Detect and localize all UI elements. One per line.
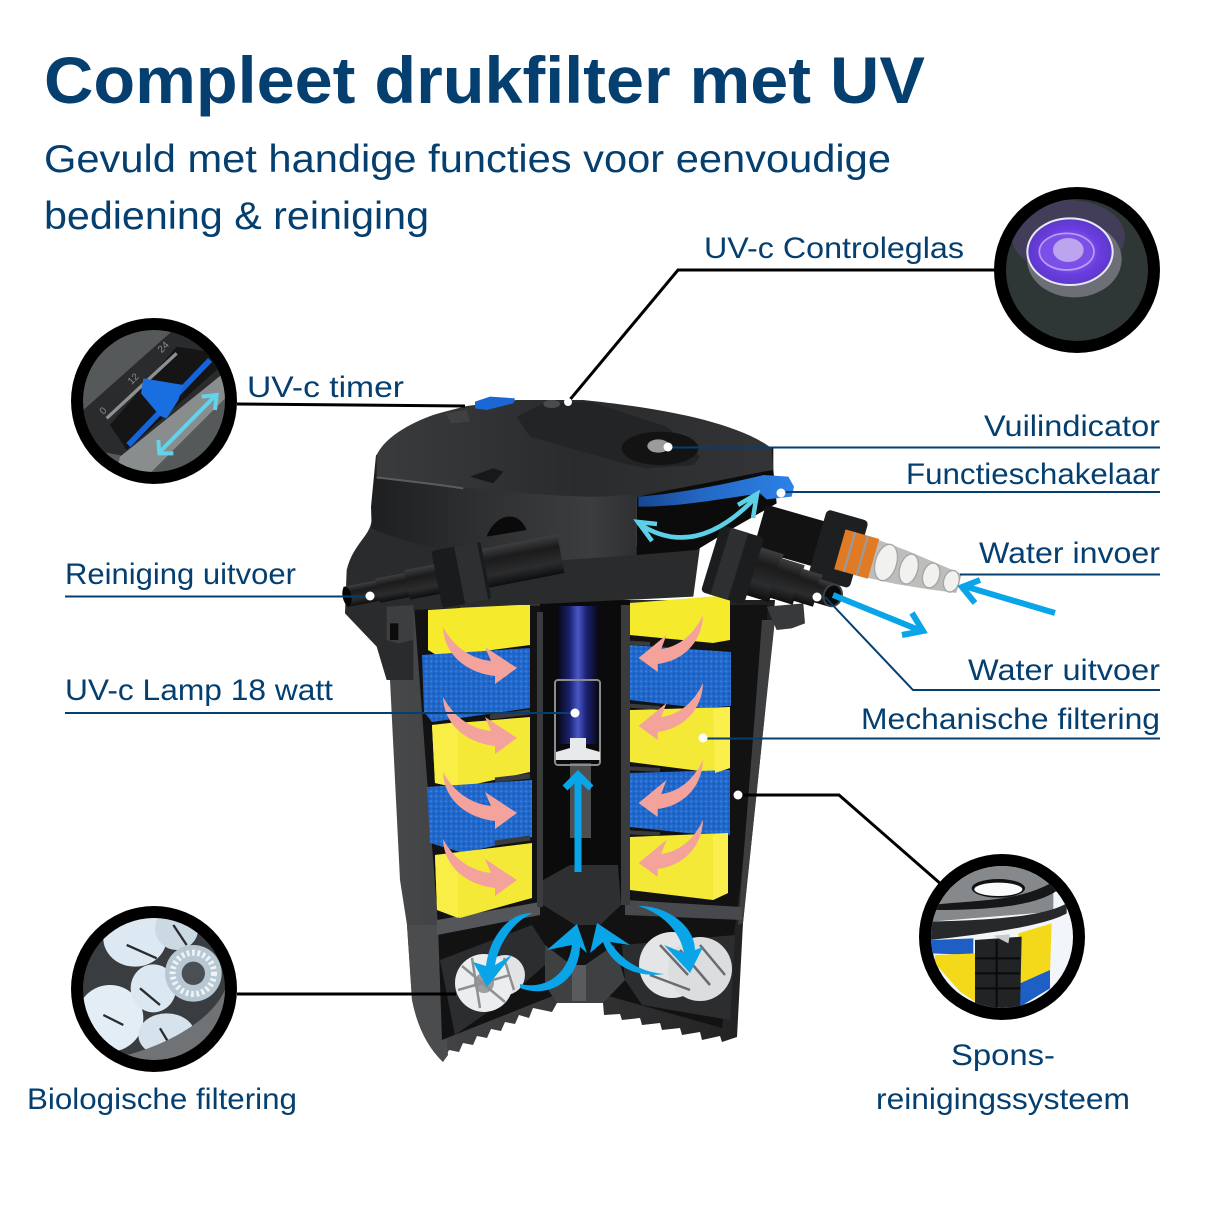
sponges left stack xyxy=(422,605,532,918)
small screw details xyxy=(445,410,470,423)
label: Functieschakelaar: Functieschakelaar xyxy=(906,458,1160,491)
subtitle: bediening & reiniging xyxy=(44,195,429,238)
UV lamp fitting xyxy=(556,738,600,760)
subtitle xyxy=(44,138,891,238)
subtitle: Gevuld met handige functies voor eenvoudige xyxy=(44,138,891,181)
label: Biologische filtering: Biologische filtering xyxy=(27,1083,297,1116)
clear hose tail xyxy=(853,535,965,603)
water outlet pipe xyxy=(701,525,852,632)
label: Spons-reinigingssysteem xyxy=(876,1039,1130,1116)
centre column xyxy=(537,600,630,925)
water inlet pipe xyxy=(750,493,969,617)
lower compartment panels xyxy=(437,900,742,1035)
label: UV-c timer: UV-c timer xyxy=(247,371,404,404)
handle recess xyxy=(637,470,777,555)
left outlet pipe xyxy=(337,527,567,627)
label: UV-c Controleglas: UV-c Controleglas xyxy=(704,232,964,265)
right wall rim xyxy=(738,620,775,925)
arrow: water out xyxy=(833,595,923,635)
filter body outer wall xyxy=(386,600,775,1062)
inset: UV-c timer xyxy=(71,318,237,484)
timer blue slider xyxy=(475,397,515,410)
label: Water invoer: Water invoer xyxy=(979,537,1160,570)
inset: sponge cleaning system xyxy=(919,854,1085,1020)
label: Reiniging uitvoer: Reiniging uitvoer xyxy=(65,558,296,591)
label: Spons-reinigingssysteem: Spons- xyxy=(951,1039,1055,1072)
black leader lines xyxy=(237,270,995,994)
label: UV-c Lamp 18 watt: UV-c Lamp 18 watt xyxy=(65,674,334,707)
leader lines xyxy=(65,448,1160,738)
ribbed lower skirt xyxy=(407,925,448,1062)
label: Spons-reinigingssysteem: reinigingssysteem xyxy=(876,1083,1130,1116)
inset: UV-c control glass xyxy=(994,187,1160,353)
label: Water uitvoer: Water uitvoer xyxy=(968,654,1160,687)
sponges right stack xyxy=(622,595,731,900)
inset: UV-c timer: 12 xyxy=(126,371,142,387)
interior cavity xyxy=(414,605,768,1040)
lower flange xyxy=(345,520,700,680)
blue flow arrows bottom xyxy=(473,906,703,991)
label: Mechanische filtering: Mechanische filtering xyxy=(861,703,1160,736)
filter product cutaway xyxy=(337,397,969,1062)
inset: UV-c timer: 0 xyxy=(98,405,110,417)
lid side xyxy=(371,448,773,560)
biological media balls xyxy=(455,932,732,1012)
title: Compleet drukfilter met UV xyxy=(44,43,925,117)
function switch handle xyxy=(638,475,794,507)
orange connector xyxy=(834,529,879,579)
inset: UV-c timer: 24 xyxy=(156,340,172,355)
pink flow arrows left xyxy=(443,627,517,896)
right pipes xyxy=(701,493,969,632)
pink flow arrows right xyxy=(639,615,703,877)
blue flow arrow up xyxy=(565,775,591,872)
label: Vuilindicator: Vuilindicator xyxy=(984,410,1160,443)
inset: biological media xyxy=(71,906,237,1072)
raised top panel xyxy=(517,402,700,468)
leader end dots xyxy=(366,398,822,800)
cyan switch arrow xyxy=(638,494,757,541)
lid and flange xyxy=(337,397,805,680)
arrow: water in xyxy=(962,580,1055,613)
lid top surface xyxy=(377,400,773,497)
